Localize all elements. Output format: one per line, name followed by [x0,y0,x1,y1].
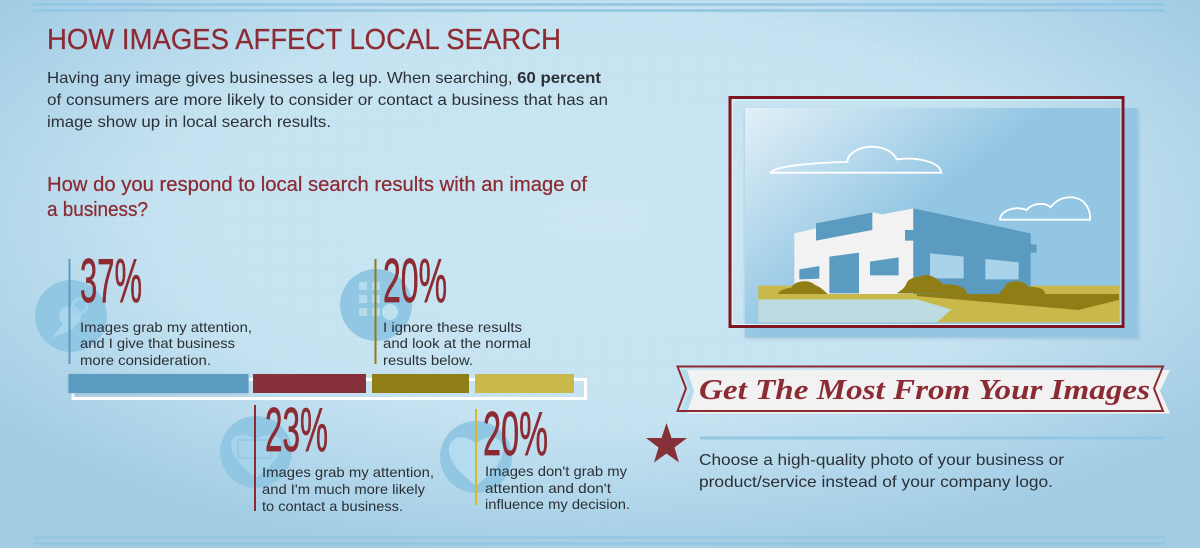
description: Images grab my attention, [262,464,434,480]
description: and I give that business [80,335,235,351]
icon: heart in circle [440,421,512,493]
chart question heading: How do you respond to local search results with an image of [47,174,587,196]
description: attention and don't [485,480,611,496]
intro text: of consumers are more likely to consider or contact a business that has an [47,92,608,109]
description: I ignore these results [383,319,522,335]
intro text: image show up in local search results. [47,114,331,131]
stat: 37 percent: 37% [80,247,142,316]
red frame [730,98,1123,326]
tip text: product/service instead of your company logo. [699,474,1053,491]
value: 20% [383,247,447,316]
description: more consideration. [80,352,211,368]
value: 20% [483,400,548,469]
building scene [758,147,1119,322]
description [80,319,252,368]
icon: star [646,423,687,462]
intro text: Having any image gives businesses a leg up. When searching, 60 percent [47,70,602,87]
title: HOW IMAGES AFFECT LOCAL SEARCH [47,24,561,56]
stat: 23 percent [220,396,434,514]
intro text [47,70,608,131]
value: 23% [265,396,328,465]
chart question heading [47,174,587,221]
description: Images don't grab my [485,463,627,479]
tip text [699,436,1165,491]
icon: pushpin in circle [35,280,107,352]
stacked percentage bar [68,374,586,398]
icon: envelope and heart in circle [220,416,292,488]
description [262,464,434,514]
stat: 20 percent no influence [440,400,630,512]
description: results below. [383,352,473,368]
picture shadow [745,109,1139,339]
ribbon banner [678,366,1170,414]
description: to contact a business. [262,498,403,514]
stat: 37 percent [35,247,252,368]
description [485,463,630,512]
illustration: building picture [730,98,1139,339]
tip text: Choose a high-quality photo of your business or [699,452,1065,469]
description: and look at the normal [383,335,531,351]
icon: keypad and magnifier in circle [340,269,412,341]
description: and I'm much more likely [262,481,425,497]
stat: 20 percent ignore [340,247,531,368]
description: influence my decision. [485,496,630,512]
banner heading: Get The Most From Your Images [699,374,1150,406]
chart question heading: a business? [47,199,148,221]
description [383,319,531,368]
description: Images grab my attention, [80,319,252,335]
picture background sky [745,108,1137,337]
